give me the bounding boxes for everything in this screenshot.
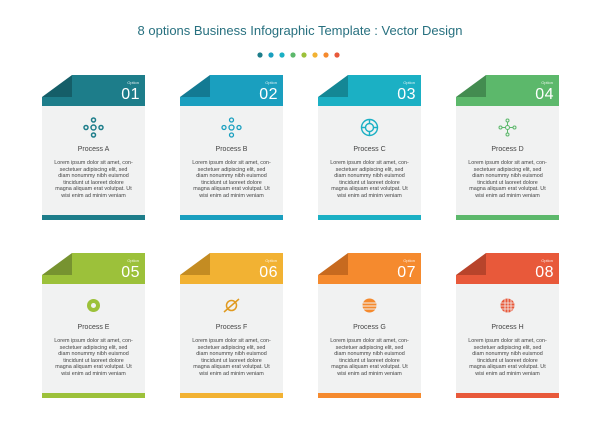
card: option 05: magna aliquam erat volutpat. Ut <box>55 364 132 370</box>
card: option 08: Option <box>541 258 553 263</box>
card: option 05: sectetuer adipiscing elit, sed <box>60 344 127 350</box>
card: option 06: Option <box>265 258 277 263</box>
card: option 02: Process B <box>216 146 247 153</box>
card: option 06: Lorem ipsum dolor sit amet, con- <box>192 338 271 344</box>
card: option 05: 05 <box>121 264 140 281</box>
card: option 01: Lorem ipsum dolor sit amet, con- <box>54 160 133 166</box>
card: option 03: Process C <box>353 146 386 153</box>
card: option 02: 02 <box>259 86 278 103</box>
card: option 07: tincidunt ut laoreet dolore <box>339 358 400 364</box>
card: option 08: sectetuer adipiscing elit, sed <box>474 344 541 350</box>
card: option 01 <box>42 75 145 220</box>
card: option 07: wisi enim ad minim veniam <box>337 370 402 376</box>
card: option 08: diam nonummy nibh euismod <box>472 351 543 357</box>
card: option 03: Option <box>403 80 415 85</box>
card: option 06: diam nonummy nibh euismod <box>196 351 267 357</box>
card: option 08: magna aliquam erat volutpat. Ut <box>469 364 546 370</box>
card: option 04: sectetuer adipiscing elit, sed <box>474 166 541 172</box>
card: option 06 <box>180 253 283 398</box>
card: option 05: tincidunt ut laoreet dolore <box>63 358 124 364</box>
card: option 01: 01 <box>121 86 140 103</box>
card: option 05: Option <box>127 258 139 263</box>
card: option 05 <box>42 253 145 398</box>
card: option 04: Process D <box>491 146 524 153</box>
card: option 08: 08 <box>535 264 554 281</box>
card: option 03: 03 <box>397 86 416 103</box>
card: option 06: tincidunt ut laoreet dolore <box>201 358 262 364</box>
card: option 04: wisi enim ad minim veniam <box>475 192 540 198</box>
card: option 04: Lorem ipsum dolor sit amet, con- <box>468 160 547 166</box>
card: option 07: magna aliquam erat volutpat. Ut <box>331 364 408 370</box>
card: option 01: magna aliquam erat volutpat. Ut <box>55 186 132 192</box>
card: option 08: Process H <box>491 324 524 331</box>
card: option 01: diam nonummy nibh euismod <box>58 173 129 179</box>
card: option 01: tincidunt ut laoreet dolore <box>63 180 124 186</box>
card: option 06: 06 <box>259 264 278 281</box>
card: option 05: diam nonummy nibh euismod <box>58 351 129 357</box>
card: option 07: Option <box>403 258 415 263</box>
dots <box>257 52 340 58</box>
card: option 02: diam nonummy nibh euismod <box>196 173 267 179</box>
card: option 01: sectetuer adipiscing elit, sed <box>60 166 127 172</box>
card: option 04: diam nonummy nibh euismod <box>472 173 543 179</box>
card: option 06: magna aliquam erat volutpat. Ut <box>193 364 270 370</box>
card: option 04: tincidunt ut laoreet dolore <box>477 180 538 186</box>
card: option 03: wisi enim ad minim veniam <box>337 192 402 198</box>
card: option 01: Process A <box>78 146 109 153</box>
card: option 03: diam nonummy nibh euismod <box>334 173 405 179</box>
card: option 08: Lorem ipsum dolor sit amet, con- <box>468 338 547 344</box>
card: option 04: magna aliquam erat volutpat. Ut <box>469 186 546 192</box>
card: option 03: sectetuer adipiscing elit, sed <box>336 166 403 172</box>
card: option 04: 04 <box>535 86 554 103</box>
card: option 08: wisi enim ad minim veniam <box>475 370 540 376</box>
card: option 07: diam nonummy nibh euismod <box>334 351 405 357</box>
card: option 07: sectetuer adipiscing elit, sed <box>336 344 403 350</box>
card: option 07 <box>318 253 421 398</box>
card: option 02 <box>180 75 283 220</box>
card: option 05: Process E <box>78 324 109 331</box>
card: option 02: tincidunt ut laoreet dolore <box>201 180 262 186</box>
title: 8 options Business Infographic Template : Vector Design <box>138 23 462 38</box>
card: option 05: wisi enim ad minim veniam <box>61 370 126 376</box>
card: option 07: Process G <box>353 324 386 331</box>
card: option 03 <box>318 75 421 220</box>
card: option 02: Option <box>265 80 277 85</box>
card: option 01: wisi enim ad minim veniam <box>61 192 126 198</box>
card: option 08 <box>456 253 559 398</box>
card: option 05: Lorem ipsum dolor sit amet, con- <box>54 338 133 344</box>
card: option 03: magna aliquam erat volutpat. Ut <box>331 186 408 192</box>
card: option 07: 07 <box>397 264 416 281</box>
card: option 03: Lorem ipsum dolor sit amet, con- <box>330 160 409 166</box>
card: option 07: Lorem ipsum dolor sit amet, con- <box>330 338 409 344</box>
card: option 06: wisi enim ad minim veniam <box>199 370 264 376</box>
card: option 02: wisi enim ad minim veniam <box>199 192 264 198</box>
card: option 06: sectetuer adipiscing elit, sed <box>198 344 265 350</box>
card: option 02: Lorem ipsum dolor sit amet, con- <box>192 160 271 166</box>
card: option 03: tincidunt ut laoreet dolore <box>339 180 400 186</box>
card: option 06: Process F <box>216 324 247 331</box>
card: option 04: Option <box>541 80 553 85</box>
card: option 04 <box>456 75 559 220</box>
card: option 02: magna aliquam erat volutpat. Ut <box>193 186 270 192</box>
card: option 02: sectetuer adipiscing elit, sed <box>198 166 265 172</box>
card: option 01: Option <box>127 80 139 85</box>
card: option 08: tincidunt ut laoreet dolore <box>477 358 538 364</box>
